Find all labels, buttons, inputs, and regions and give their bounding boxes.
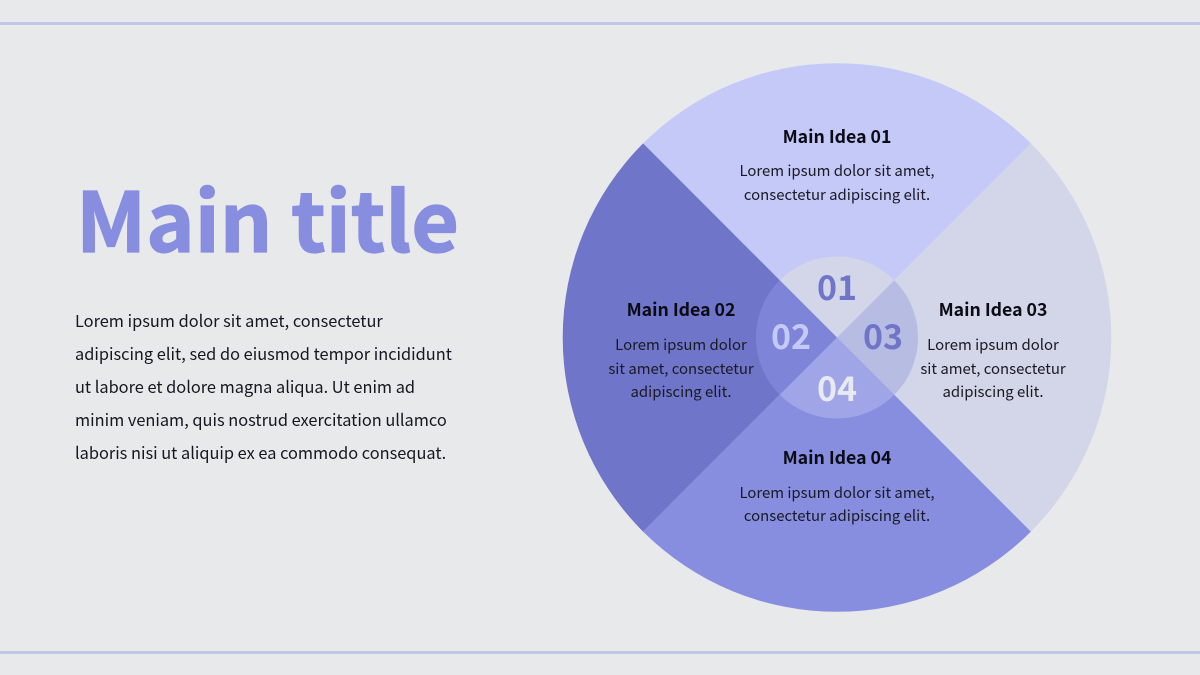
idea 03 text: sit amet, consectetur xyxy=(920,358,1066,379)
idea 03 text: Main Idea 03 xyxy=(939,296,1047,322)
wedge 02 xyxy=(563,143,837,532)
wedge 01 xyxy=(643,63,1031,338)
idea 03 text: adipiscing elit. xyxy=(943,381,1043,402)
idea 03 text: Lorem ipsum dolor xyxy=(927,334,1059,355)
idea 01 text: Lorem ipsum dolor sit amet, xyxy=(739,160,935,181)
title: Main title xyxy=(76,157,459,276)
centre segment 03 xyxy=(837,280,918,395)
wedge 03 xyxy=(837,143,1111,532)
idea 02 text: Lorem ipsum dolor xyxy=(615,334,747,355)
intro text block: Lorem ipsum dolor sit amet, consectetur xyxy=(75,308,383,332)
centre segment 01 xyxy=(780,256,894,338)
wedge 04 xyxy=(643,338,1031,612)
centre segment 04 xyxy=(780,338,894,419)
idea 03 text xyxy=(920,296,1066,402)
centre segment 04: 04 xyxy=(817,362,857,411)
circular diagram xyxy=(563,63,1111,612)
centre segment 01: 01 xyxy=(817,261,857,310)
intro text block: adipiscing elit, sed do eiusmod tempor incididunt xyxy=(75,341,452,365)
idea 04 text xyxy=(739,444,935,526)
idea 04 text: Lorem ipsum dolor sit amet, xyxy=(739,482,935,503)
idea 01 text: Main Idea 01 xyxy=(783,123,891,149)
intro text block: laboris nisi ut aliquip ex ea commodo consequat. xyxy=(75,440,446,464)
centre segment 02 xyxy=(756,280,837,395)
idea 04 text: Main Idea 04 xyxy=(783,444,891,470)
idea 02 text: Main Idea 02 xyxy=(627,296,735,322)
centre segment 02: 02 xyxy=(771,310,811,359)
intro text block: minim veniam, quis nostrud exercitation ullamco xyxy=(75,407,447,431)
centre segment 03: 03 xyxy=(863,310,903,359)
idea 01 text xyxy=(739,123,935,205)
intro text block: ut labore et dolore magna aliqua. Ut enim ad xyxy=(75,374,415,398)
idea 01 text: consectetur adipiscing elit. xyxy=(744,184,930,205)
idea 02 text xyxy=(608,296,754,402)
intro text block xyxy=(75,308,452,464)
idea 02 text: sit amet, consectetur xyxy=(608,358,754,379)
idea 04 text: consectetur adipiscing elit. xyxy=(744,505,930,526)
idea 02 text: adipiscing elit. xyxy=(631,381,731,402)
